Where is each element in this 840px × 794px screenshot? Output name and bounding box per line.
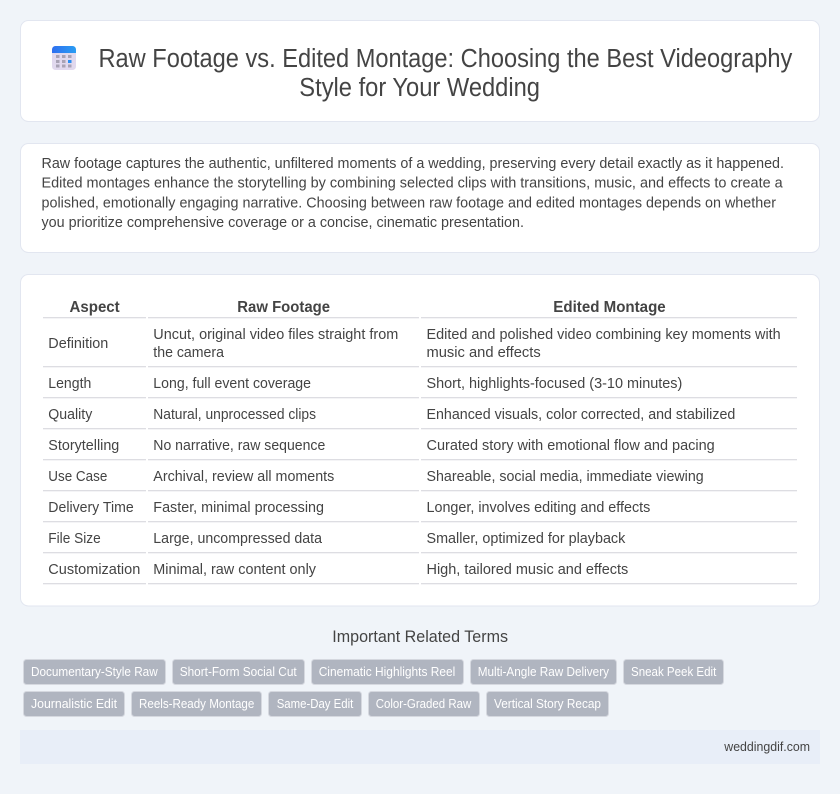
tag list: related terms: Short-Form Social Cut [180,665,297,679]
table header row [70,299,666,316]
row: Customization: Minimal, raw content only [153,562,317,578]
row: File Size: Large, uncompressed data [153,531,323,547]
text block: introduction paragraph: Raw footage captures the authentic, unfiltered moments of a wedding, preserving every detail exactly as it happened. [42,156,784,172]
tag list: related terms: Vertical Story Recap [494,697,601,711]
row: Use Case: Shareable, social media, immediate viewing [426,469,704,485]
row: Quality [48,407,735,423]
text block: introduction paragraph: you prioritize comprehensive coverage or a concise, cinematic presentation. [42,215,524,231]
row: Definition: Edited and polished video combining key moments with [426,327,781,343]
row: Use Case: Use Case [48,469,107,485]
row: File Size: File Size [48,531,101,547]
panel: title card [20,20,820,122]
footer: weddingdif.com [723,739,810,754]
row: Storytelling: Storytelling [48,438,119,454]
table header row: Aspect [70,299,120,316]
tag list: related terms: Cinematic Highlights Reel [319,665,455,679]
row: Storytelling: Curated story with emotional flow and pacing [426,438,715,454]
heading: important related terms: Important Related Terms [332,628,508,646]
row: Length [48,376,682,392]
row: Length: Short, highlights-focused (3-10 minutes) [426,376,682,392]
row: Definition: music and effects [426,345,541,361]
text block: introduction paragraph: polished, emotionally engaging narrative. Choosing between raw footage and edited montages depends on whether [42,195,776,211]
table header row: Edited Montage [553,299,666,316]
row: Quality: Enhanced visuals, color corrected, and stabilized [426,407,735,423]
tag list: related terms: Reels-Ready Montage [139,697,254,711]
row: Quality: Natural, unprocessed clips [153,407,316,423]
row: Delivery Time: Delivery Time [48,500,134,516]
row: Use Case [48,469,704,485]
text block: introduction paragraph: Edited montages enhance the storytelling by combining selected clips with transitions, music, and effects to create a [42,176,783,192]
row: Delivery Time: Longer, involves editing and effects [426,500,650,516]
tag list: related terms: Documentary-Style Raw [31,665,159,679]
icon: calendar [52,46,76,70]
tag list: related terms: Same-Day Edit [277,697,354,711]
tag list: related terms [24,660,724,716]
tag list: related terms: Journalistic Edit [31,697,118,711]
row: Use Case: Archival, review all moments [153,469,334,485]
row: Storytelling [48,438,715,454]
panel: introduction [20,144,820,252]
row: Customization: Customization [48,562,140,578]
row: Delivery Time: Faster, minimal processing [153,500,324,516]
row: Definition: Uncut, original video files straight from [153,327,398,343]
row: Definition: Definition [48,336,108,352]
title: Raw Footage vs. Edited Montage: Choosing the Best Videography [98,45,793,73]
table header row: Raw Footage [237,299,330,316]
row: Delivery Time [48,500,650,516]
footer [20,730,820,764]
text block: introduction paragraph [42,156,784,231]
tag list: related terms: Sneak Peek Edit [631,665,717,679]
row: Length: Long, full event coverage [153,376,311,392]
tag list: related terms: Multi-Angle Raw Delivery [478,665,610,679]
row: Definition [48,327,781,361]
row: Customization [48,562,628,578]
tag list: related terms: Color-Graded Raw [376,697,472,711]
title [98,45,793,102]
title: Style for Your Wedding [299,74,540,102]
row: Quality: Quality [48,407,93,423]
row: File Size: Smaller, optimized for playback [426,531,626,547]
row: Definition: the camera [153,345,225,361]
row: Customization: High, tailored music and effects [426,562,628,578]
panel: comparison table [20,274,820,606]
row: Storytelling: No narrative, raw sequence [153,438,325,454]
row: File Size [48,531,626,547]
row: Length: Length [48,376,91,392]
